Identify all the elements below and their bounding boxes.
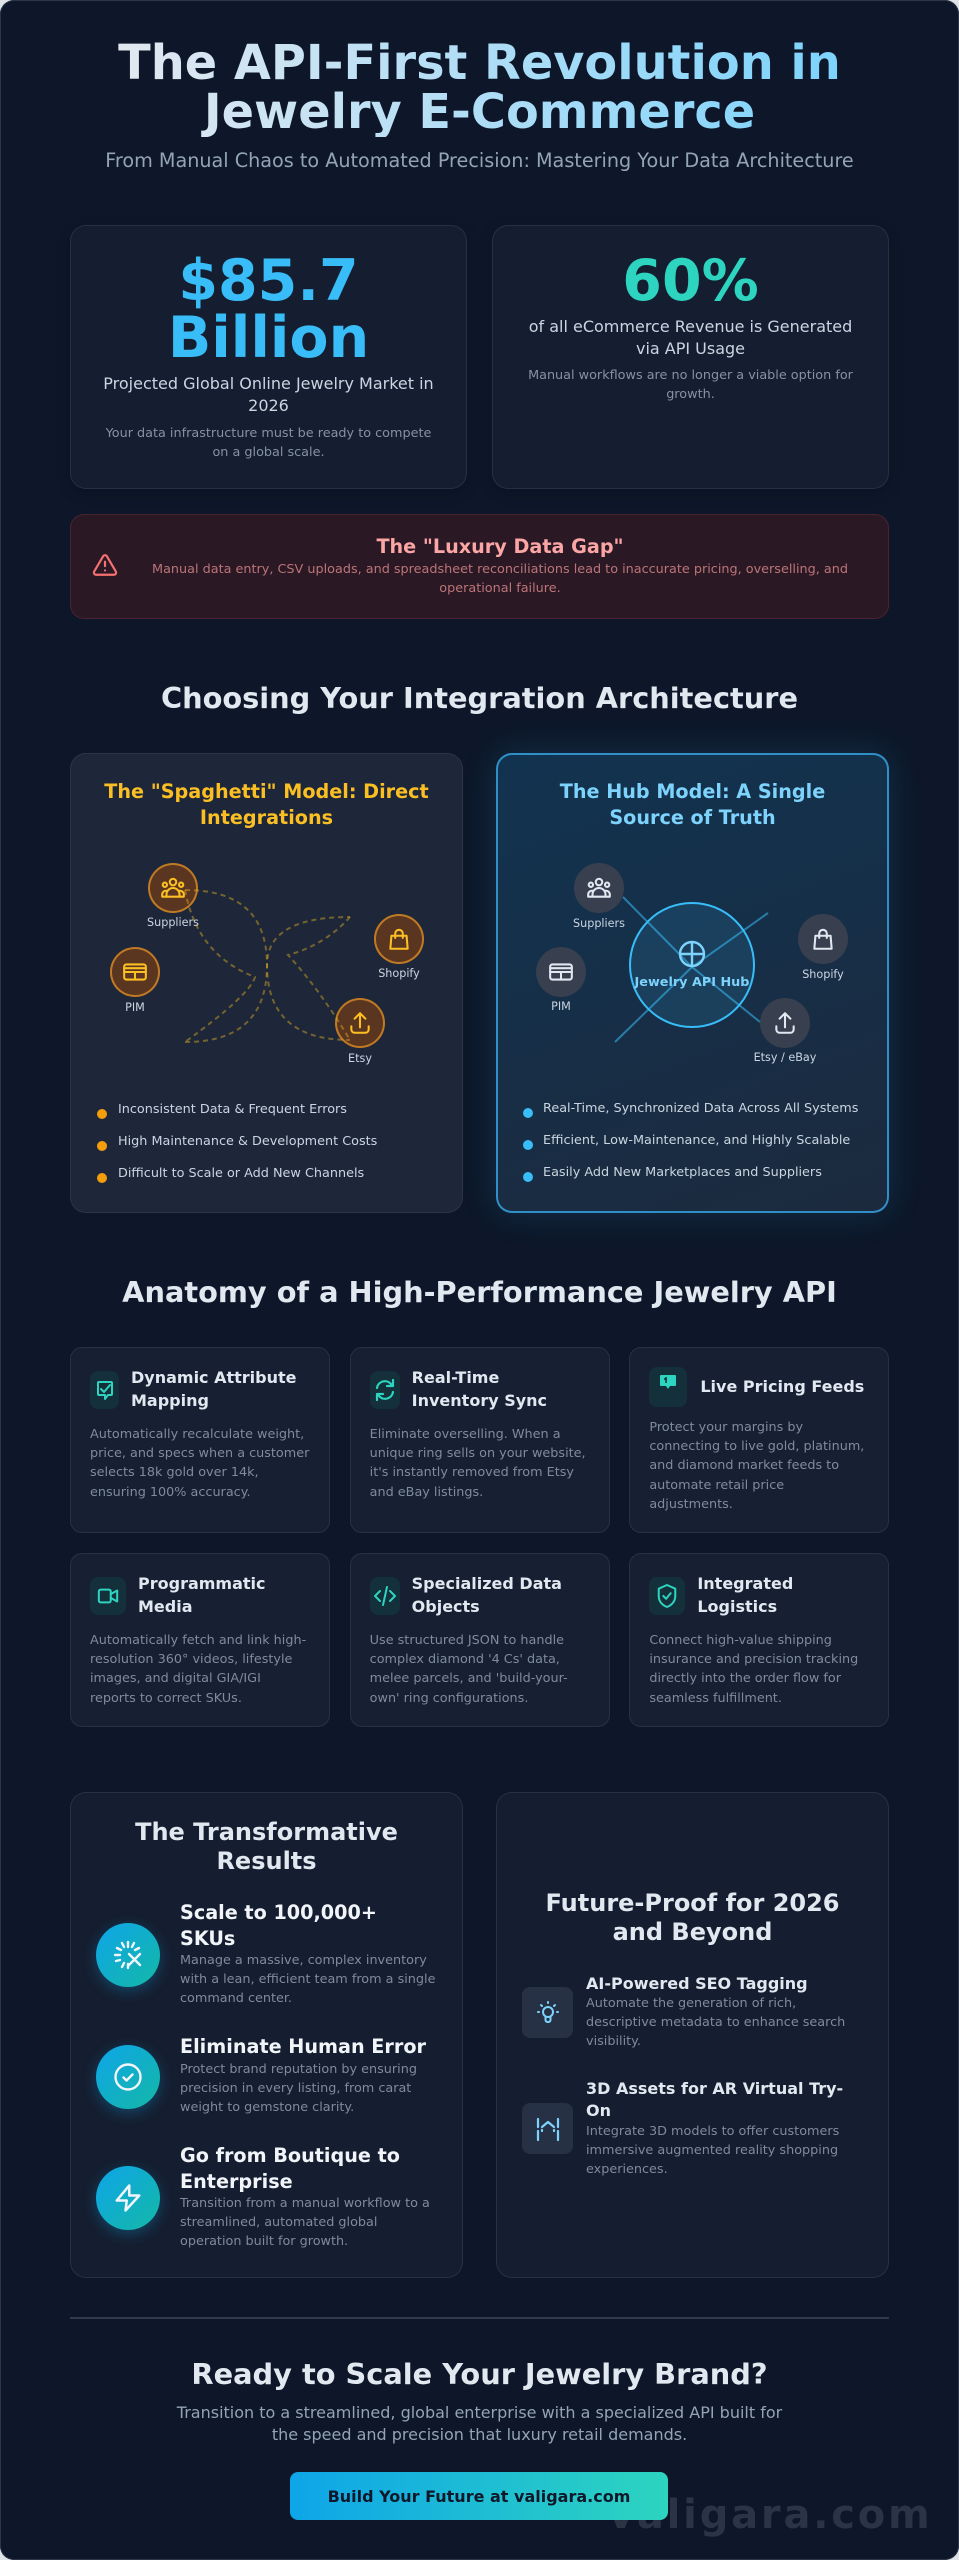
label: suppliers: Suppliers (147, 916, 199, 929)
stat note: Your data infrastructure must be ready to compete (106, 426, 431, 441)
stat label: Projected Global Online Jewelry Market in (103, 374, 434, 393)
panel: programmatic media (70, 1553, 330, 1727)
result title: Scale to 100,000+ (180, 1901, 377, 1924)
node: suppliers (574, 863, 624, 913)
icon: light bulb (522, 1987, 573, 2038)
bullet dot (97, 1173, 107, 1183)
result title: SKUs (180, 1927, 235, 1950)
card title: Specialized Data (412, 1574, 562, 1593)
card title: Integrated (697, 1574, 793, 1593)
card text: images, and digital GIA/IGI (90, 1671, 261, 1686)
alert heading: The "Luxury Data Gap" (376, 535, 624, 558)
result text: Transition from a manual workflow to a (180, 2196, 430, 2211)
label: PIM: PIM (551, 1000, 571, 1013)
hub label: Jewelry API Hub (635, 975, 749, 990)
hub heading: Source of Truth (609, 806, 776, 829)
CTA button: Build Your Future at valigara.com (328, 2486, 630, 2506)
future item text: Integrate 3D models to offer customers (586, 2124, 839, 2139)
chart: tangled dashed connections (184, 889, 351, 1043)
stat value: Billion (168, 305, 369, 371)
card text: connecting to live gold, platinum, (649, 1439, 864, 1454)
central hub circle (629, 902, 755, 1028)
spaghetti heading: Integrations (200, 806, 333, 829)
node: PIM (110, 947, 160, 997)
stat note: growth. (666, 387, 715, 402)
card text: directly into the order flow for (649, 1671, 841, 1686)
bullet text: Inconsistent Data & Frequent Errors (118, 1102, 347, 1117)
result text: Protect brand reputation by ensuring (180, 2062, 417, 2077)
icon: message check (90, 1371, 119, 1409)
spaghetti heading (104, 780, 429, 829)
section heading: API anatomy: Anatomy of a High-Performance Jewelry API (122, 1275, 837, 1309)
panel: transformative results (70, 1792, 463, 2278)
stat label: of all eCommerce Revenue is Generated (529, 317, 852, 336)
card text: melee parcels, and 'build-your- (370, 1671, 568, 1686)
card title (138, 1574, 266, 1616)
node: Shopify (374, 914, 424, 964)
stat note (528, 368, 853, 402)
card text: complex diamond '4 Cs' data, (370, 1652, 560, 1667)
node: Shopify (798, 914, 848, 964)
CTA text: Transition to a streamlined, global enterprise with a specialized API built for (177, 2403, 782, 2422)
future item title: On (586, 2101, 611, 2120)
stat value: 60% (622, 248, 759, 314)
alert text: operational failure. (439, 581, 561, 596)
panel: hub model (496, 753, 889, 1213)
card text: and eBay listings. (370, 1485, 483, 1500)
stat note (106, 426, 431, 460)
card text: selects 18k gold over 14k, (90, 1465, 259, 1480)
stat value: $85.7 (178, 248, 359, 314)
panel: dynamic attribute mapping (70, 1347, 330, 1533)
panel: integrated logistics (629, 1553, 889, 1727)
card text (370, 1633, 568, 1706)
result title: Go from Boutique to (180, 2144, 400, 2167)
card text (90, 1633, 306, 1706)
card text (370, 1427, 586, 1500)
panel: real-time inventory sync (350, 1347, 610, 1533)
label: Etsy / eBay: Etsy / eBay (754, 1051, 816, 1064)
future item text: experiences. (586, 2162, 668, 2177)
bullet dot (523, 1140, 533, 1150)
stat label (103, 374, 434, 415)
result text: with a lean, efficient team from a single (180, 1972, 435, 1987)
card title: Logistics (697, 1597, 777, 1616)
panel: specialized data objects (350, 1553, 610, 1727)
icon: hub crosshair (678, 940, 706, 968)
card text: insurance and precision tracking (649, 1652, 858, 1667)
label: PIM: PIM (125, 1001, 145, 1014)
future item text (586, 2124, 839, 2177)
card text: price, and specs when a customer (90, 1446, 309, 1461)
CTA text (176, 2403, 782, 2444)
label: Shopify: Shopify (378, 967, 420, 980)
watermark: valigara.com (608, 2492, 932, 2538)
card title (131, 1368, 297, 1410)
spaghetti heading: The "Spaghetti" Model: Direct (104, 780, 429, 803)
bullet text: Real-Time, Synchronized Data Across All Systems (543, 1101, 858, 1116)
icon: warning triangle (92, 554, 118, 576)
label: Etsy: Etsy (348, 1052, 372, 1065)
card title: Dynamic Attribute (131, 1368, 297, 1387)
results heading: Results (216, 1847, 317, 1875)
CTA button (290, 2472, 668, 2520)
bullet text: Difficult to Scale or Add New Channels (118, 1166, 364, 1181)
card text (649, 1420, 864, 1512)
card title (697, 1574, 793, 1616)
card text: seamless fulfillment. (649, 1691, 782, 1706)
CTA heading: Ready to Scale Your Jewelry Brand? (191, 2357, 768, 2391)
node: Etsy / eBay (760, 998, 810, 1048)
bullet text: Easily Add New Marketplaces and Suppliers (543, 1165, 822, 1180)
bullet dot (523, 1172, 533, 1182)
card title: Live Pricing Feeds (700, 1377, 864, 1396)
future heading: Future-Proof for 2026 (545, 1889, 840, 1917)
card text: adjustments. (649, 1497, 733, 1512)
card title (412, 1574, 562, 1616)
card text: it's instantly removed from Etsy (370, 1465, 574, 1480)
future item title: 3D Assets for AR Virtual Try- (586, 2079, 843, 2098)
icon: 3D arch (522, 2103, 573, 2154)
icon: check circle (96, 2045, 160, 2109)
node: PIM (536, 947, 586, 997)
result text (180, 2062, 417, 2115)
future heading: and Beyond (613, 1918, 772, 1946)
card text: Use structured JSON to handle (370, 1633, 564, 1648)
future item title (586, 2079, 843, 2120)
result text: Manage a massive, complex inventory (180, 1953, 427, 1968)
panel: market stat (70, 225, 467, 489)
node: Etsy (335, 998, 385, 1048)
icon: code (370, 1577, 400, 1615)
results heading (135, 1818, 398, 1875)
bullet dot (97, 1109, 107, 1119)
result text: streamlined, automated global (180, 2215, 377, 2230)
card title: Mapping (131, 1391, 209, 1410)
title (118, 39, 841, 137)
chart: hub connection lines (614, 896, 768, 1043)
title: The API-First Revolution in (118, 36, 841, 91)
future heading (545, 1889, 840, 1946)
result title: Enterprise (180, 2170, 293, 2193)
bullet dot (97, 1141, 107, 1151)
section heading: integration architecture: Choosing Your Integration Architecture (161, 681, 798, 715)
bullet dot (523, 1108, 533, 1118)
stat label (529, 317, 852, 358)
icon: scale (96, 1923, 160, 1987)
card text: automate retail price (649, 1478, 784, 1493)
card text: own' ring configurations. (370, 1691, 528, 1706)
card text: Eliminate overselling. When a (370, 1427, 561, 1442)
card text (649, 1633, 858, 1706)
future item text: visibility. (586, 2034, 641, 2049)
future item title: AI-Powered SEO Tagging (586, 1974, 808, 1993)
result text (180, 2196, 430, 2249)
icon: pricing bubble (649, 1367, 687, 1407)
panel: live pricing feeds (629, 1347, 889, 1533)
future item text: descriptive metadata to enhance search (586, 2015, 845, 2030)
hub heading (560, 780, 825, 829)
label: Shopify: Shopify (802, 968, 844, 981)
results heading: The Transformative (135, 1818, 398, 1846)
icon: video (90, 1577, 126, 1615)
icon: shield check (649, 1577, 685, 1615)
result text: precision in every listing, from carat (180, 2081, 411, 2096)
hub heading: The Hub Model: A Single (560, 780, 825, 803)
result text: operation built for growth. (180, 2234, 348, 2249)
panel: luxury data gap alert (70, 514, 889, 619)
card text: Automatically recalculate weight, (90, 1427, 304, 1442)
card text: ensuring 100% accuracy. (90, 1485, 251, 1500)
alert text (152, 562, 848, 596)
result title (180, 1901, 377, 1950)
stat label: via API Usage (636, 339, 745, 358)
card text: reports to correct SKUs. (90, 1691, 242, 1706)
icon: lightning (96, 2166, 160, 2230)
result text: weight to gemstone clarity. (180, 2100, 354, 2115)
future item text: Automate the generation of rich, (586, 1996, 796, 2011)
stat label: 2026 (248, 396, 289, 415)
result title (180, 2144, 400, 2193)
label: suppliers: Suppliers (573, 917, 625, 930)
panel: spaghetti model (70, 753, 463, 1213)
card text: and diamond market feeds to (649, 1458, 839, 1473)
stat value (168, 248, 369, 371)
card title: Media (138, 1597, 193, 1616)
card text: Automatically fetch and link high- (90, 1633, 306, 1648)
subtitle: From Manual Chaos to Automated Precision: Mastering Your Data Architecture (105, 149, 854, 172)
card text: Protect your margins by (649, 1420, 803, 1435)
card text: unique ring sells on your website, (370, 1446, 586, 1461)
future item text: immersive augmented reality shopping (586, 2143, 838, 2158)
card text: Connect high-value shipping (649, 1633, 832, 1648)
card text (90, 1427, 310, 1500)
stat note: on a global scale. (212, 445, 325, 460)
future item text (586, 1996, 845, 2049)
card title: Inventory Sync (412, 1391, 547, 1410)
card text: resolution 360° videos, lifestyle (90, 1652, 292, 1667)
result text (180, 1953, 435, 2006)
card title (412, 1368, 547, 1410)
result title: Eliminate Human Error (180, 2035, 426, 2058)
bullet text: High Maintenance & Development Costs (118, 1134, 377, 1149)
title: Jewelry E-Commerce (204, 85, 755, 140)
card title: Real-Time (412, 1368, 499, 1387)
node: suppliers (148, 863, 198, 913)
bullet text: Efficient, Low-Maintenance, and Highly Scalable (543, 1133, 850, 1148)
icon: refresh (370, 1371, 400, 1409)
result text: command center. (180, 1991, 292, 2006)
card title: Programmatic (138, 1574, 266, 1593)
CTA text: the speed and precision that luxury retail demands. (272, 2425, 687, 2444)
alert text: Manual data entry, CSV uploads, and spreadsheet reconciliations lead to inaccurate pricing, overselling, and (152, 562, 848, 577)
stat note: Manual workflows are no longer a viable option for (528, 368, 853, 383)
panel: API revenue stat (492, 225, 889, 489)
panel: future-proof (496, 1792, 889, 2278)
card title: Objects (412, 1597, 480, 1616)
